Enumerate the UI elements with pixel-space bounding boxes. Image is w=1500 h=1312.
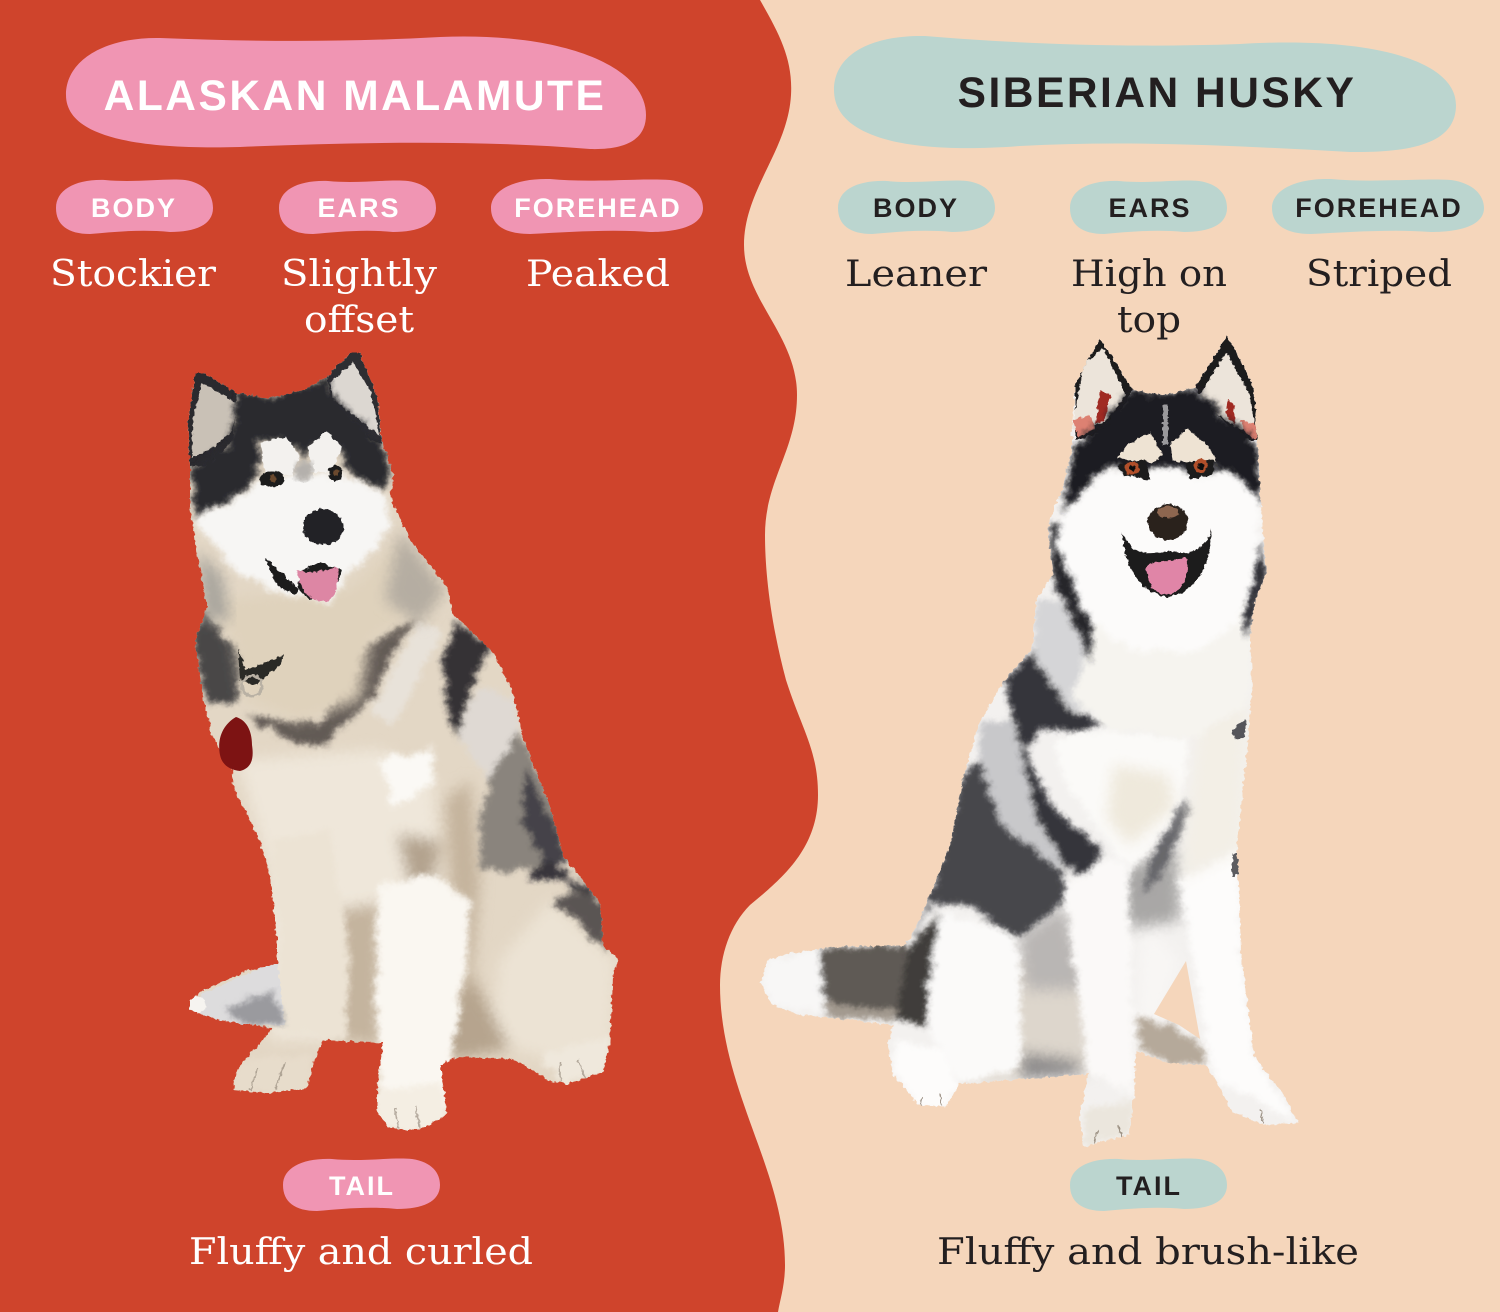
trait: husky tail: [937, 1159, 1359, 1273]
trait: body: BODY: [873, 193, 959, 223]
tail: [821, 944, 908, 1021]
heading: Siberian Husky: [834, 36, 1456, 152]
trait: husky tail: Fluffy and brush-like: [937, 1232, 1359, 1273]
collar: [238, 650, 285, 685]
trait: ears: High on: [1071, 254, 1227, 295]
trait: ears: offset: [304, 300, 415, 341]
front paws: [893, 1040, 960, 1108]
panel: red Alaskan Malamute side: [0, 0, 818, 1312]
trait: body: [838, 181, 995, 295]
head dark cap: [190, 377, 393, 519]
white face: [1056, 465, 1258, 650]
trait: body: [50, 180, 217, 295]
heading: Alaskan Malamute: ALASKAN MALAMUTE: [104, 73, 606, 120]
paws: [233, 1060, 314, 1094]
trait: malamute tail: TAIL: [329, 1171, 395, 1201]
shoulder stripes: [443, 621, 490, 738]
collar band: [245, 615, 420, 748]
trait: ears: top: [1117, 300, 1181, 341]
trait: malamute tail: Fluffy and curled: [189, 1232, 533, 1273]
white front leg: [377, 876, 470, 1110]
icon: red dog tag: [219, 717, 253, 771]
trait: ears: EARS: [317, 193, 401, 223]
trait: forehead: [491, 179, 703, 295]
mouth: [1122, 530, 1212, 597]
eye masks: [1117, 460, 1150, 480]
brows: [1117, 432, 1163, 463]
trait: ears: [279, 181, 438, 341]
neck stripes: [1050, 525, 1093, 660]
grey back: [480, 717, 570, 872]
hind paw: [1138, 1018, 1205, 1065]
heading: Alaskan Malamute: [66, 37, 646, 149]
trait: forehead: Peaked: [526, 254, 670, 295]
trait: forehead: [1272, 179, 1484, 295]
trait: body: Stockier: [50, 254, 217, 295]
eyes: [260, 471, 284, 487]
nose: [303, 509, 343, 545]
gap between husky body and right leg: [1154, 961, 1200, 1039]
neck white: [1070, 638, 1250, 726]
trait: malamute tail: [189, 1159, 533, 1273]
tongue: [1147, 558, 1188, 594]
trait: forehead: FOREHEAD: [1295, 193, 1463, 223]
eyes: [1125, 461, 1139, 475]
trait: ears: Slightly: [281, 254, 438, 295]
head ears: [188, 373, 237, 467]
trait: husky tail: TAIL: [1116, 1171, 1182, 1201]
illustration: Siberian Husky dog: [755, 330, 1305, 1150]
trait: ears: EARS: [1108, 193, 1192, 223]
tongue: [297, 567, 338, 602]
brows: [260, 436, 300, 475]
trait: body: BODY: [91, 193, 177, 223]
tail: [190, 960, 285, 1025]
trait: forehead: FOREHEAD: [514, 193, 682, 223]
trait: forehead: Striped: [1306, 254, 1452, 295]
black cap: [1063, 386, 1262, 515]
left neck dark: [192, 610, 240, 703]
ears: [1075, 338, 1133, 440]
trait: body: Leaner: [845, 254, 988, 295]
nose: [1148, 504, 1188, 540]
trait: ears: [1070, 181, 1227, 341]
label group: husky traits: [838, 179, 1484, 341]
white face: [193, 473, 392, 603]
neck cream: [208, 571, 412, 729]
illustration: Alaskan Malamute dog: [180, 345, 625, 1140]
heading: Siberian Husky: SIBERIAN HUSKY: [958, 70, 1356, 117]
label group: malamute traits: [50, 179, 703, 341]
mouth: [265, 557, 342, 600]
